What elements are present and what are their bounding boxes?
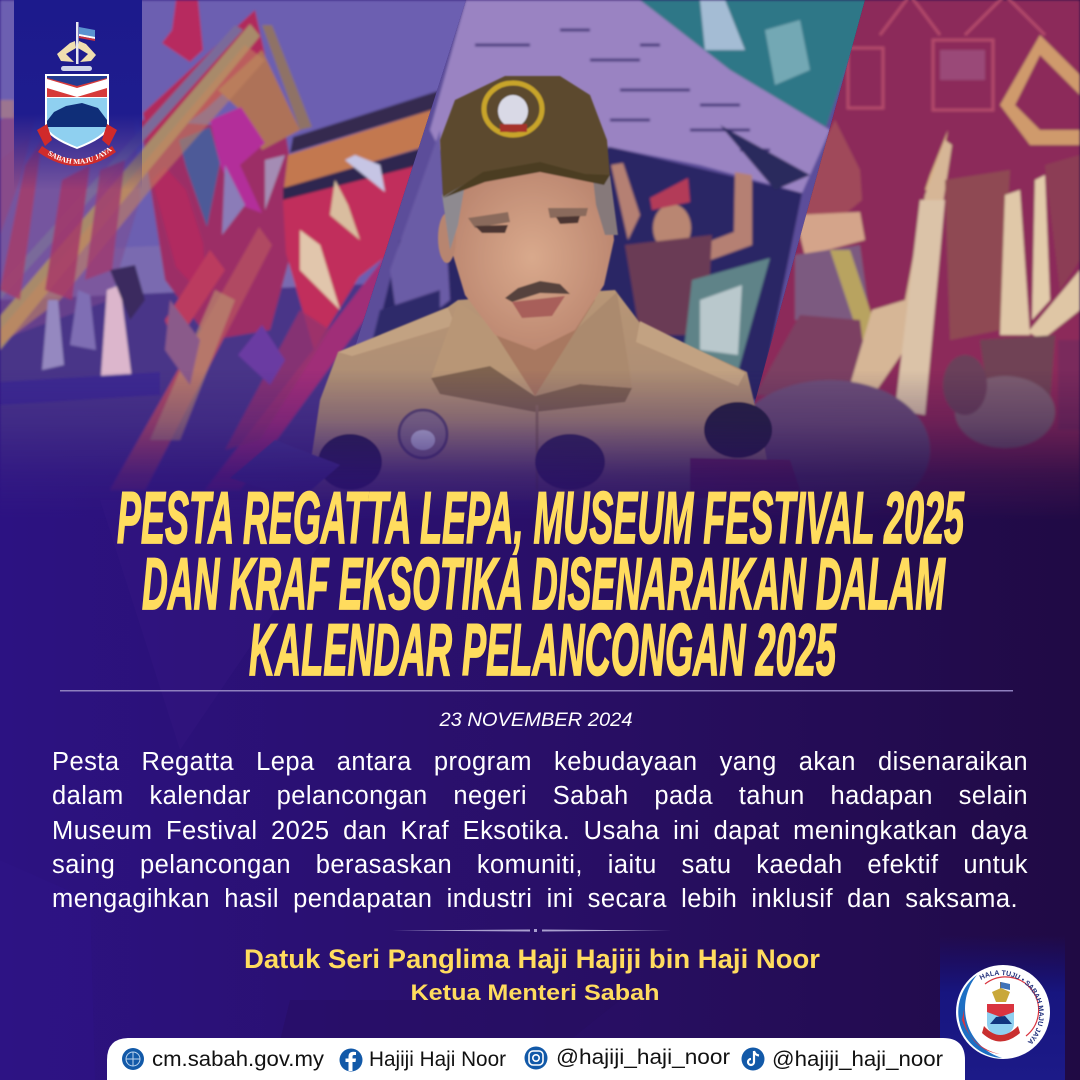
flag: diagonal poles xyxy=(110,227,412,490)
background: lower facets xyxy=(0,500,620,1080)
facebook text: Hajiji Haji Noor xyxy=(369,1048,506,1071)
tiktok text: @hajiji_haji_noor xyxy=(772,1048,943,1071)
flag: brown band xyxy=(218,50,300,150)
photo: crafts and textile xyxy=(720,0,1080,530)
face xyxy=(438,165,618,350)
flag: magenta xyxy=(210,107,265,213)
title xyxy=(117,478,965,691)
contact bar xyxy=(107,1038,965,1080)
neck xyxy=(480,300,595,396)
author name: Datuk Seri Panglima Haji Hajiji bin Haji Noor xyxy=(244,944,820,974)
divider line xyxy=(60,690,1013,692)
cap xyxy=(440,76,610,198)
body text: Museum Festival 2025 dan Kraf Eksotika. Usaha ini dapat meningkatkan daya xyxy=(52,817,1028,845)
flag: base colour mass xyxy=(140,120,300,340)
icon: facebook xyxy=(340,1048,362,1072)
photo: longhouse and dancer xyxy=(356,0,865,404)
flag: pole fringe right xyxy=(262,25,312,130)
flag: top pennant xyxy=(162,0,203,62)
gradient fade into lower panel xyxy=(0,370,1080,525)
website text: cm.sabah.gov.my xyxy=(152,1048,325,1071)
motto: SABAH MAJU JAYA xyxy=(48,148,112,164)
flag: sky gap xyxy=(222,165,245,235)
body text: mengagihkan hasil pendapatan industri ini secara lebih inklusif dan saksama. xyxy=(52,885,1018,913)
emblem: Sabah coat of arms xyxy=(37,22,117,166)
panel behind bottom logo xyxy=(940,935,1065,1080)
body text xyxy=(52,748,1028,913)
flag: crimson triangle xyxy=(143,10,265,150)
logo: Hala Tuju badge xyxy=(956,965,1050,1059)
body text: saing pelancongan berasaskan komuniti, iaitu satu kaedah efektif untuk xyxy=(52,851,1028,879)
icon: instagram xyxy=(524,1046,548,1070)
icon: website xyxy=(122,1048,144,1070)
date: 23 NOVEMBER 2024 xyxy=(438,710,632,731)
instagram text: @hajiji_haji_noor xyxy=(556,1046,730,1069)
shirt xyxy=(305,290,775,500)
panel behind top logo xyxy=(14,0,142,190)
flag: striped banner xyxy=(283,90,441,350)
microphones xyxy=(230,402,800,500)
icon: tiktok xyxy=(742,1048,764,1070)
badge xyxy=(399,410,447,458)
ornament divider xyxy=(392,929,672,932)
body text: dalam kalendar pelancongan negeri Sabah pada tahun hadapan selain xyxy=(52,782,1028,810)
flag: white sails xyxy=(42,285,285,390)
body text: Pesta Regatta Lepa antara program kebudayaan yang akan disenaraikan xyxy=(52,748,1028,776)
flag: left streamers xyxy=(0,100,125,300)
dancer xyxy=(611,163,752,335)
photo: regatta lepa flags xyxy=(0,0,466,491)
flag: blue xyxy=(179,127,220,227)
flag: mast band xyxy=(0,24,260,350)
portrait: Chief Minister xyxy=(230,76,800,500)
flag: lower crimson xyxy=(154,170,204,280)
author role: Ketua Menteri Sabah xyxy=(410,980,660,1005)
badge lettering: HALA TUJU • SABAH MAJU JAYA xyxy=(979,970,1044,1044)
